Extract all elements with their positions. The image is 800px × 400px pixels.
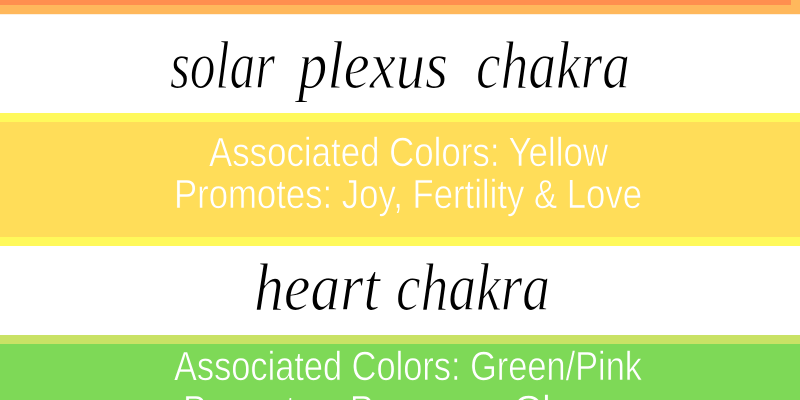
heading: solar plexus chakra: solar xyxy=(170,27,275,103)
top border band xyxy=(0,0,800,15)
heading: heart chakra: chakra xyxy=(396,249,550,325)
heading: solar plexus chakra xyxy=(170,27,630,103)
panel: heart chakra details xyxy=(0,335,800,400)
panel: heart chakra details: Associated Colors: Green/Pink xyxy=(174,343,642,389)
panel: solar plexus chakra details xyxy=(0,113,800,246)
heading: solar plexus chakra: plexus xyxy=(295,27,448,103)
panel: solar plexus chakra details: Promotes: Joy, Fertility & Love xyxy=(174,171,642,217)
heading: heart chakra: heart xyxy=(254,249,382,325)
panel: solar plexus chakra details: Associated Colors: Yellow xyxy=(209,129,608,175)
heading: heart chakra xyxy=(254,249,550,325)
heading: solar plexus chakra: chakra xyxy=(476,27,630,103)
